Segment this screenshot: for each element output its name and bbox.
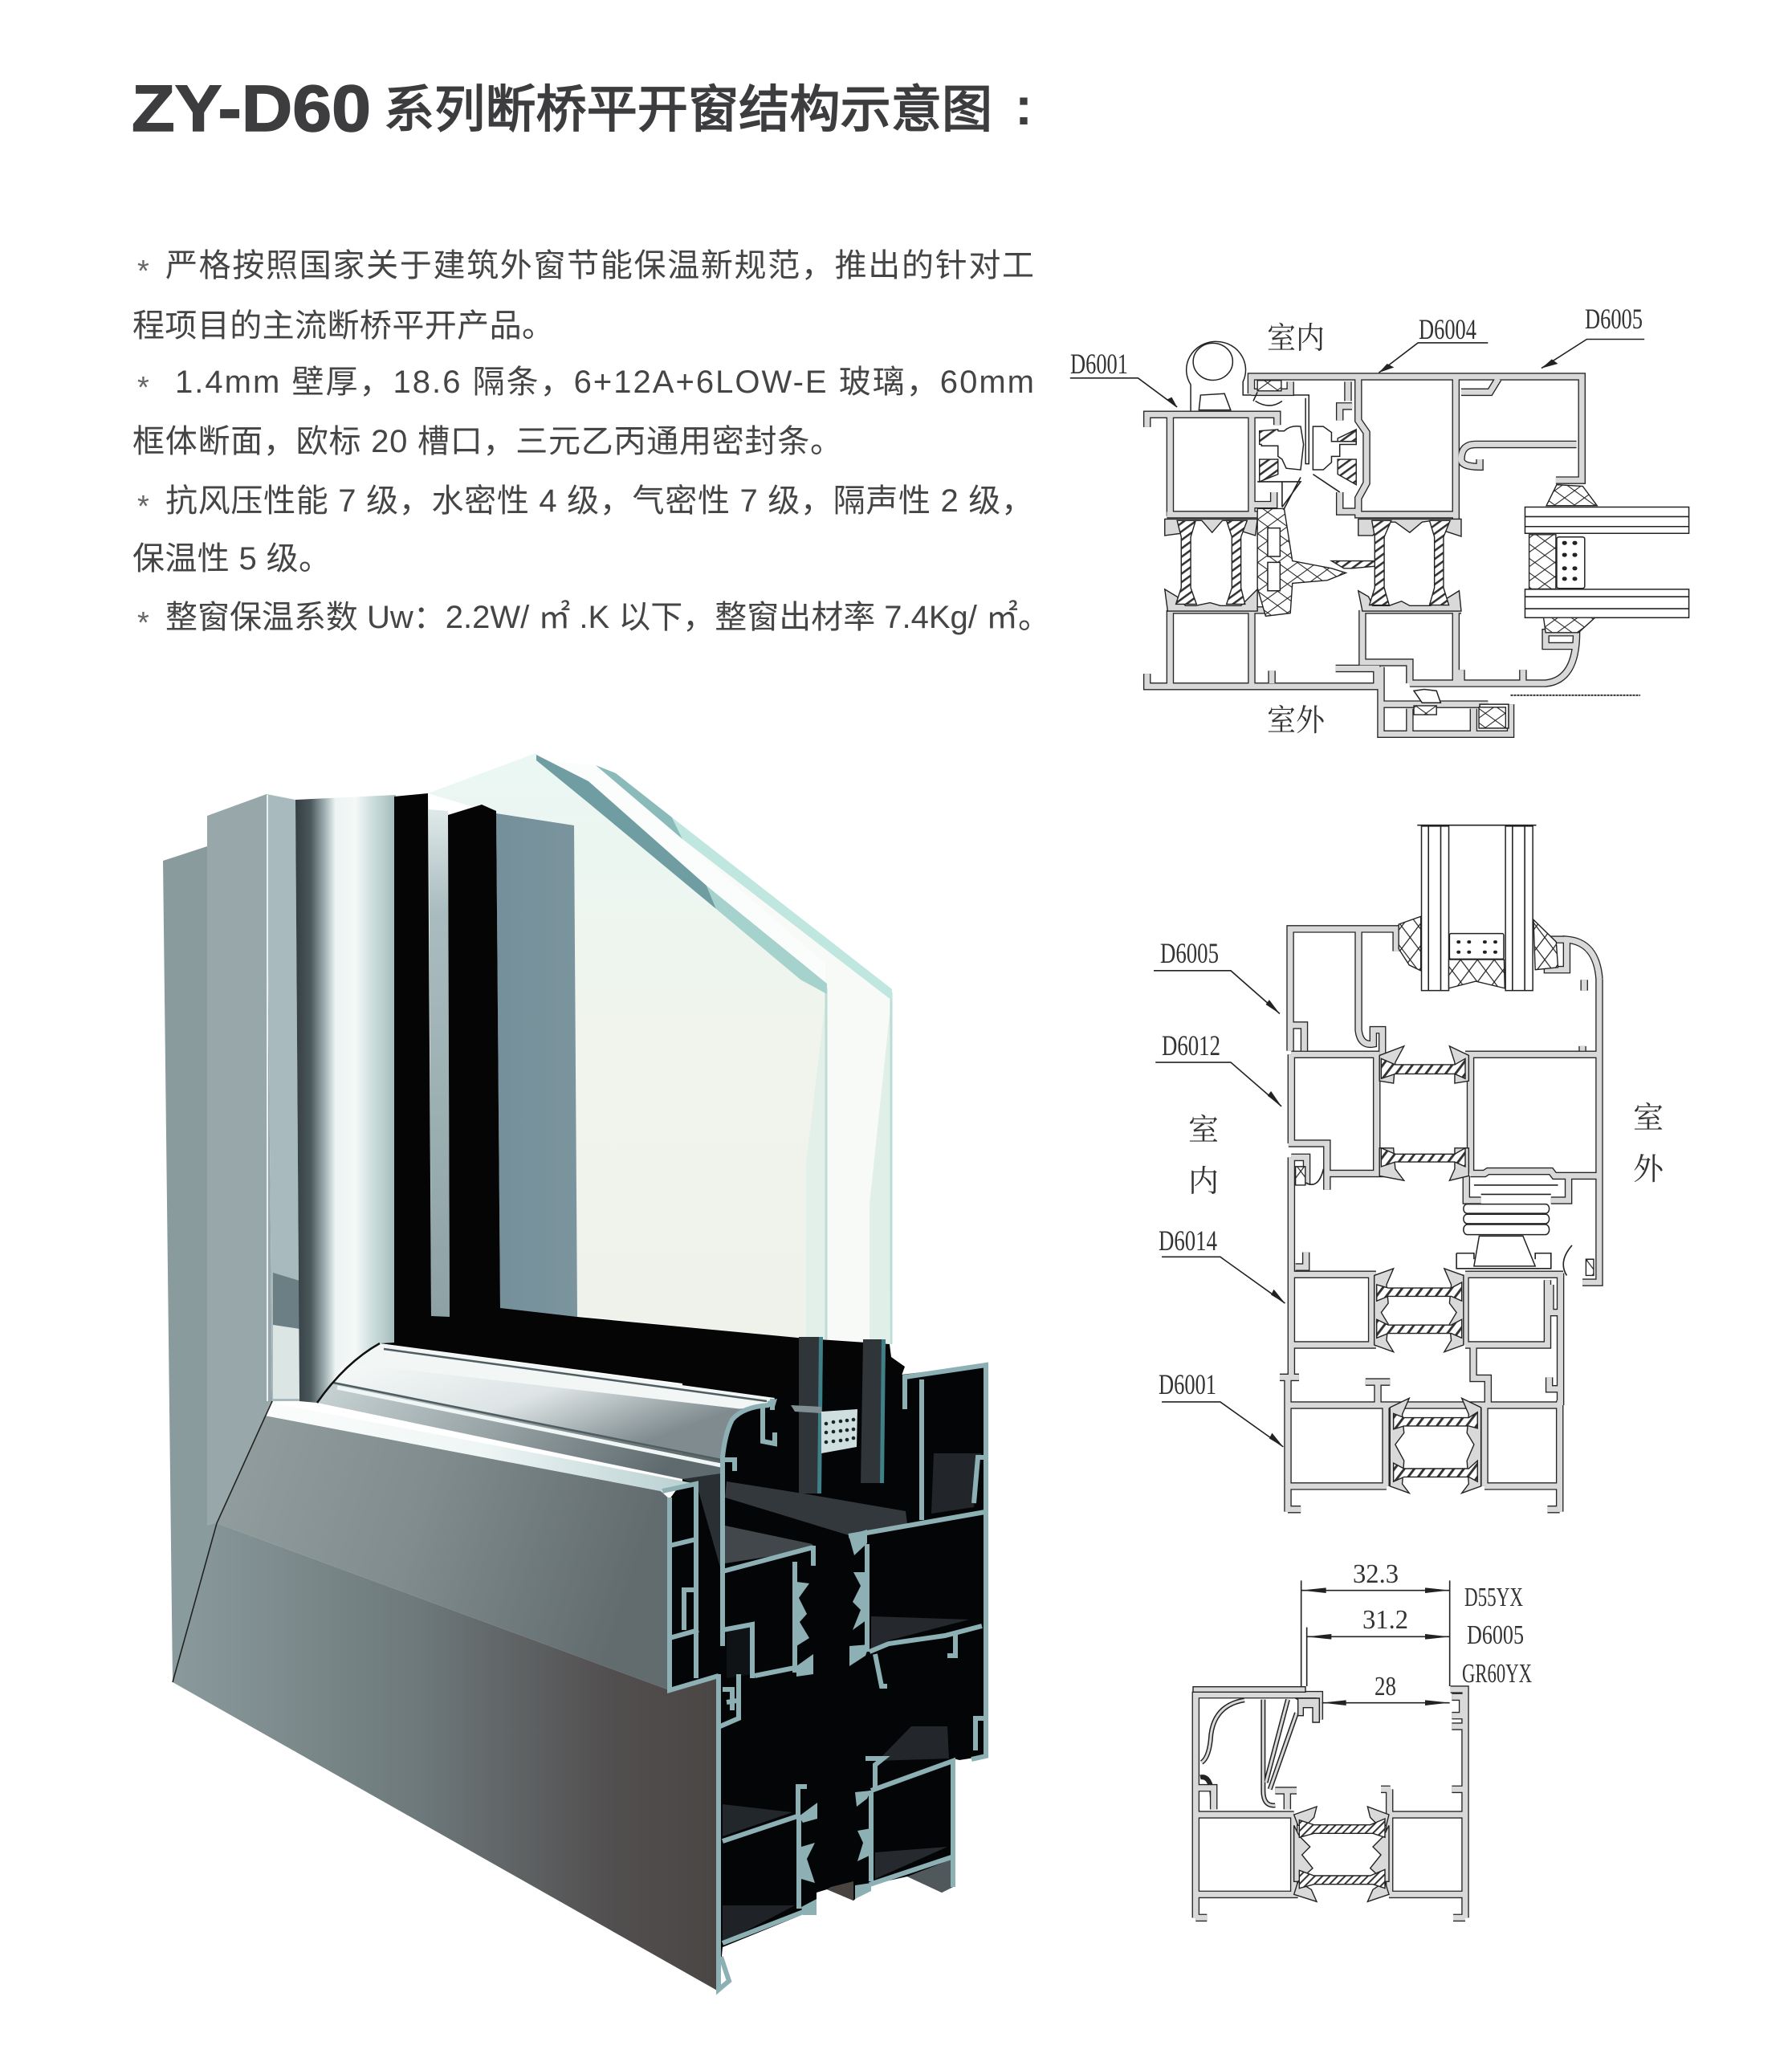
glass edge band <box>806 988 827 1339</box>
leader D6012 <box>1155 1062 1281 1106</box>
label D6005: D6005 <box>1585 303 1643 335</box>
glass unit <box>1417 825 1536 991</box>
blue-grey reflection <box>496 813 577 1317</box>
profile walls <box>1195 1689 1465 1917</box>
text block: product description: * <box>137 490 149 524</box>
central bellows gasket <box>1456 1185 1558 1269</box>
label D6001: D6001 <box>1070 348 1128 380</box>
label outdoor vertical: 室 <box>1633 1102 1664 1135</box>
text block: product description <box>132 248 1050 640</box>
hinge loop <box>1187 341 1309 464</box>
value 28: 28 <box>1375 1672 1396 1701</box>
dimension extension lines <box>1301 1580 1450 1686</box>
polyamide strips <box>1377 1058 1477 1481</box>
text block: product description: * <box>137 606 149 640</box>
label D6012: D6012 <box>1162 1029 1220 1062</box>
leader D6001 <box>1162 1402 1283 1447</box>
glass bevel dark <box>536 755 716 909</box>
left frame face <box>163 816 273 1682</box>
inner bead <box>1200 1700 1297 1809</box>
bead inner lines <box>1202 1700 1297 1805</box>
label D55YX: D55YX <box>1464 1583 1523 1612</box>
text block: product description: * <box>137 371 149 405</box>
leader D6014 <box>1162 1257 1285 1303</box>
grey strip <box>429 809 450 1317</box>
interior faces <box>666 1453 981 1943</box>
polyamide strips <box>1299 1819 1385 1889</box>
glass pane main <box>428 753 827 1341</box>
text block: product description: 程项目的主流断桥平开产品。 <box>132 308 554 344</box>
title: : <box>1015 76 1032 136</box>
text block: product description: 整窗保温系数 Uw：2.2W/ ㎡ .K 以下，整窗出材率 7.4Kg/ ㎡。 <box>165 600 1050 635</box>
frame lower face <box>173 1523 719 1991</box>
glass edge band right <box>870 992 892 1344</box>
light inner strip <box>207 794 272 1526</box>
corner gaskets <box>1296 1167 1594 1275</box>
leader D6005 <box>1542 339 1644 369</box>
profile walls <box>1147 377 1582 734</box>
polyamide strips <box>1176 520 1450 605</box>
label outdoor: 室外 <box>1267 704 1326 738</box>
diagram: dimension cross-section bottom <box>1193 1580 1465 1917</box>
light reflection in frame rebate <box>273 1325 299 1399</box>
value 32.3: 32.3 <box>1353 1559 1399 1589</box>
thermal break lobes <box>1294 1807 1389 1901</box>
leader D6004 <box>1379 343 1488 373</box>
mitre line <box>173 1401 272 1682</box>
text block: product description: 1.4mm 壁厚，18.6 隔条，6+12A+6LOW-E 玻璃，60mm <box>175 365 1034 400</box>
reference line <box>1511 695 1640 696</box>
label outdoor vertical: 外 <box>1633 1153 1664 1187</box>
second glass bevel dark <box>596 765 682 839</box>
second glass bevel light <box>672 817 892 1000</box>
sash top highlight <box>265 1403 697 1491</box>
label indoor vertical: 内 <box>1188 1165 1219 1199</box>
title: 系列断桥平开窗结构示意图 <box>384 82 992 138</box>
leader D6005 <box>1154 971 1280 1013</box>
label D6005: D6005 <box>1160 937 1219 969</box>
glass bevel light <box>707 886 827 994</box>
text block: product description: 框体断面，欧标 20 槽口，三元乙丙通用密封条。 <box>132 424 842 459</box>
diagram: frame cross-section top <box>1070 339 1689 734</box>
central gasket <box>1257 508 1346 616</box>
title: ZY-D60 <box>132 72 371 145</box>
sash face <box>217 1416 670 1690</box>
label GR60YX: GR60YX <box>1462 1659 1532 1689</box>
dark profile ends <box>670 1364 988 1991</box>
highlight line <box>267 795 268 1401</box>
white highlight along bevels <box>536 760 825 987</box>
profile walls <box>1280 929 1599 1512</box>
black gasket and sill <box>380 793 905 1429</box>
text block: product description: 保温性 5 级。 <box>132 541 331 577</box>
label indoor vertical: 室 <box>1188 1114 1219 1147</box>
dimension 28 line <box>1322 1700 1450 1705</box>
text block: product description: 严格按照国家关于建筑外窗节能保温新规范，推出的针对工 <box>165 248 1034 283</box>
aluminium profile lines <box>662 1365 986 1990</box>
diagram: vertical cross-section middle <box>1154 825 1599 1512</box>
hardware <box>1253 392 1356 508</box>
glazing gaskets <box>1399 916 1558 971</box>
dimension 32.3 line <box>1301 1587 1450 1593</box>
aluminium thermal break teeth <box>767 1399 871 1915</box>
bead nose <box>1295 1698 1319 1722</box>
text block: product description: 抗风压性能 7 级，水密性 4 级，气密性 7 级，隔声性 2 级， <box>165 483 1033 519</box>
glazing sections <box>799 1337 886 1493</box>
label indoor vertical <box>1188 1114 1219 1199</box>
leader D6001 <box>1070 378 1177 407</box>
label D6014: D6014 <box>1159 1225 1217 1257</box>
label D6001: D6001 <box>1159 1368 1216 1400</box>
glass unit <box>1525 507 1689 617</box>
text block: product description: * <box>137 255 149 288</box>
label D6004: D6004 <box>1419 313 1476 345</box>
label outdoor vertical <box>1633 1102 1664 1187</box>
label indoor: 室内 <box>1267 322 1325 356</box>
second glass outer band <box>596 765 892 1345</box>
bottom faces <box>827 1859 953 1901</box>
reflection in frame rebate <box>273 1273 299 1329</box>
glazing bead vertical <box>295 795 396 1403</box>
thermal break lobes <box>1165 519 1461 611</box>
thermal break lobes <box>1375 1046 1481 1493</box>
photo: window corner section <box>163 753 988 1991</box>
value 31.2: 31.2 <box>1362 1605 1408 1635</box>
spacer bar <box>791 1405 857 1453</box>
top flange <box>1193 1687 1305 1692</box>
sill glazing bead <box>317 1343 775 1479</box>
gasket top-left <box>1257 381 1281 391</box>
dimension 31.2 line <box>1307 1634 1450 1640</box>
title <box>132 72 1032 145</box>
thin right edge <box>826 988 891 1344</box>
label D6005: D6005 <box>1467 1620 1524 1650</box>
glazing gaskets <box>1414 485 1597 728</box>
frame inner strip <box>267 794 299 1401</box>
